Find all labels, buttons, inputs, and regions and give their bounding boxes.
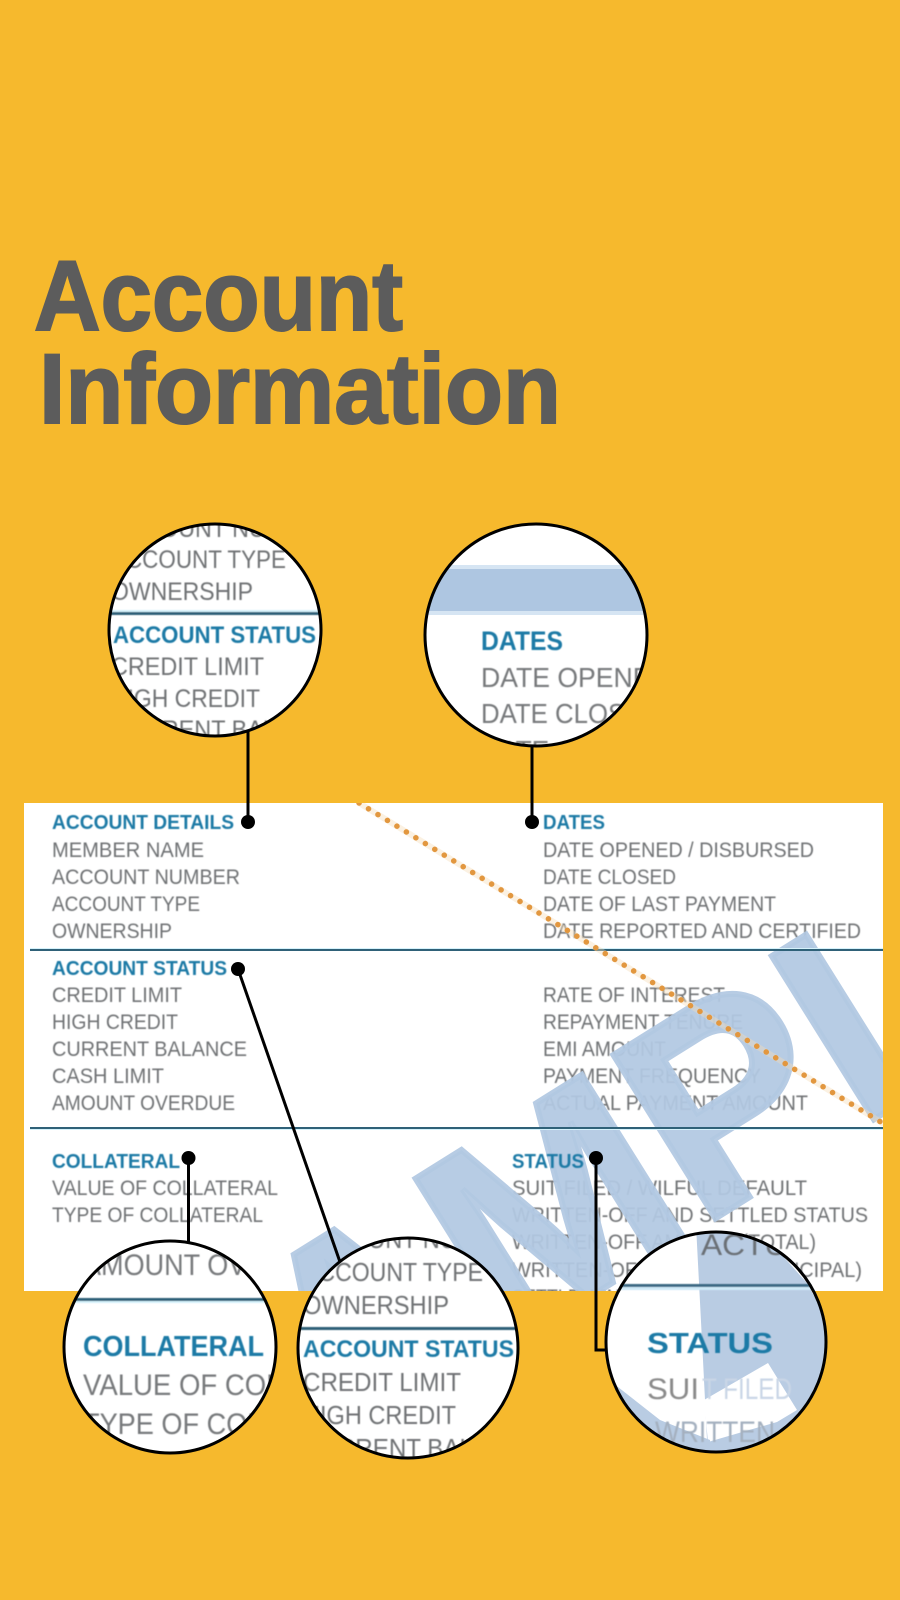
section: collateral: COLLATERAL (52, 1151, 180, 1173)
section: status: WRITTEN-OFF AND SETTLED STATUS (512, 1204, 868, 1227)
section: repayment rows: REPAYMENT TENURE (543, 1011, 743, 1034)
section: account status: ACCOUNT STATUS (52, 958, 227, 980)
magnifier: status (604, 1230, 828, 1454)
magnifier: status: T FILED (702, 1373, 792, 1406)
magnifier: account status (top): CURRENT BALANCE (111, 716, 341, 744)
magnifier: account status (bottom): ACCOUNT STATUS (303, 1336, 514, 1363)
section: account details: ACCOUNT TYPE (52, 893, 200, 916)
status heading: STATUS (512, 1151, 584, 1173)
magnifier: status: ACTUAL (701, 1229, 826, 1262)
section: account status: CREDIT LIMIT (52, 984, 182, 1007)
section: account status: CURRENT BALANCE (52, 1038, 247, 1061)
section: account status: AMOUNT OVERDUE (52, 1092, 235, 1115)
separator line 2 (30, 1127, 883, 1130)
section: dates: DATE REPORTED AND CERTIFIED (543, 920, 861, 943)
section: dates (543, 812, 861, 943)
magnifier: dates: DATE OPENED / DISBURSED (481, 662, 847, 693)
section: dates: DATE OF LAST PAYMENT (543, 893, 776, 916)
magnifier: collateral (62, 1240, 278, 1454)
section: dates: DATES (543, 812, 605, 834)
connector: dates (525, 744, 539, 829)
magnifier: account status (bottom): CREDIT LIMIT (303, 1369, 461, 1397)
dotted orange diagonal (359, 803, 884, 1124)
magnifier: status: WRITTEN (655, 1416, 775, 1449)
section: status: WRITTEN-OFF AMOUNT (PRINCIPAL) (512, 1259, 862, 1282)
section: dates: DATE OPENED / DISBURSED (543, 839, 814, 862)
magnifier: account status (top): HIGH CREDIT (111, 685, 260, 713)
magnifier: account status (bottom): ACCOUNT TYPE (303, 1259, 483, 1287)
section: status: WRITTEN-OFF AMOUNT (TOTAL) (512, 1231, 816, 1254)
section: dates: DATE CLOSED (543, 866, 676, 889)
section: account status: CASH LIMIT (52, 1065, 164, 1088)
magnifier: account status (top) (108, 522, 322, 738)
section: repayment rows: ACTUAL PAYMENT AMOUNT (543, 1092, 808, 1115)
magnifier: account status (bottom): OWNERSHIP (303, 1292, 449, 1320)
magnifier: status: SUI (647, 1373, 699, 1406)
section: repayment rows: PAYMENT FREQUENCY (543, 1065, 761, 1088)
magnifier: account status (top): OWNERSHIP (111, 578, 253, 606)
magnifier: account status (top): ACCOUNT TYPE (111, 546, 286, 574)
section: status: SUIT FILED / WILFUL DEFAULT (512, 1177, 807, 1200)
section: collateral: VALUE OF COLLATERAL (52, 1177, 278, 1200)
section: account details (52, 812, 240, 943)
panel: sample credit report excerpt (24, 803, 883, 1291)
magnifier: collateral: VALUE OF COLLATERAL (83, 1369, 402, 1402)
title: Information (39, 333, 561, 444)
title (34, 240, 561, 444)
connector: collateral (182, 1151, 196, 1245)
section: account status (52, 958, 247, 1115)
section: account status: HIGH CREDIT (52, 1011, 178, 1034)
connector: account status (231, 962, 340, 1262)
magnifier: collateral: COLLATERAL (83, 1331, 264, 1363)
separator line 1 (30, 948, 883, 951)
magnifier: collateral: TYPE OF COLLATERAL (83, 1408, 381, 1441)
section: account details: ACCOUNT NUMBER (52, 866, 240, 889)
magnifier: dates (424, 522, 648, 748)
section: status: SETTLEMENT AMOUNT (512, 1286, 712, 1309)
magnifier: account status (bottom): HIGH CREDIT (303, 1402, 456, 1430)
section: account details: MEMBER NAME (52, 839, 204, 862)
magnifier: account status (top): CREDIT LIMIT (111, 653, 264, 681)
section: account details: OWNERSHIP (52, 920, 172, 943)
magnifier: collateral: AMOUNT OVERDUE (83, 1249, 341, 1282)
section: status (512, 1180, 868, 1291)
magnifier: dates: DATE OF LAST PAYMENT (481, 735, 796, 766)
magnifier: account status (bottom): ACCOUNT NUMBER (300, 1226, 525, 1254)
magnifier: account status (bottom): CURRENT BALANCE (303, 1435, 540, 1463)
section: collateral (52, 1151, 278, 1227)
connector: status (589, 1151, 608, 1350)
section: collateral: TYPE OF COLLATERAL (52, 1204, 263, 1227)
magnifier: dates: DATES (481, 626, 563, 656)
connector: account details (241, 730, 255, 829)
magnifier: account status (top): ACCOUNT STATUS (113, 622, 316, 649)
magnifier: account status (bottom) (296, 1236, 520, 1460)
section: account details: ACCOUNT DETAILS (52, 812, 234, 834)
section: repayment rows: EMI AMOUNT (543, 1038, 666, 1061)
section: repayment rows: RATE OF INTEREST (543, 984, 725, 1007)
title: Account (34, 240, 403, 351)
magnifier: status: STATUS (647, 1328, 773, 1360)
magnifier: account status (top): ACCOUNT NUMBER (111, 515, 333, 543)
section: repayment rows (543, 984, 808, 1115)
magnifier: dates: DATE CLOSED (481, 698, 661, 729)
